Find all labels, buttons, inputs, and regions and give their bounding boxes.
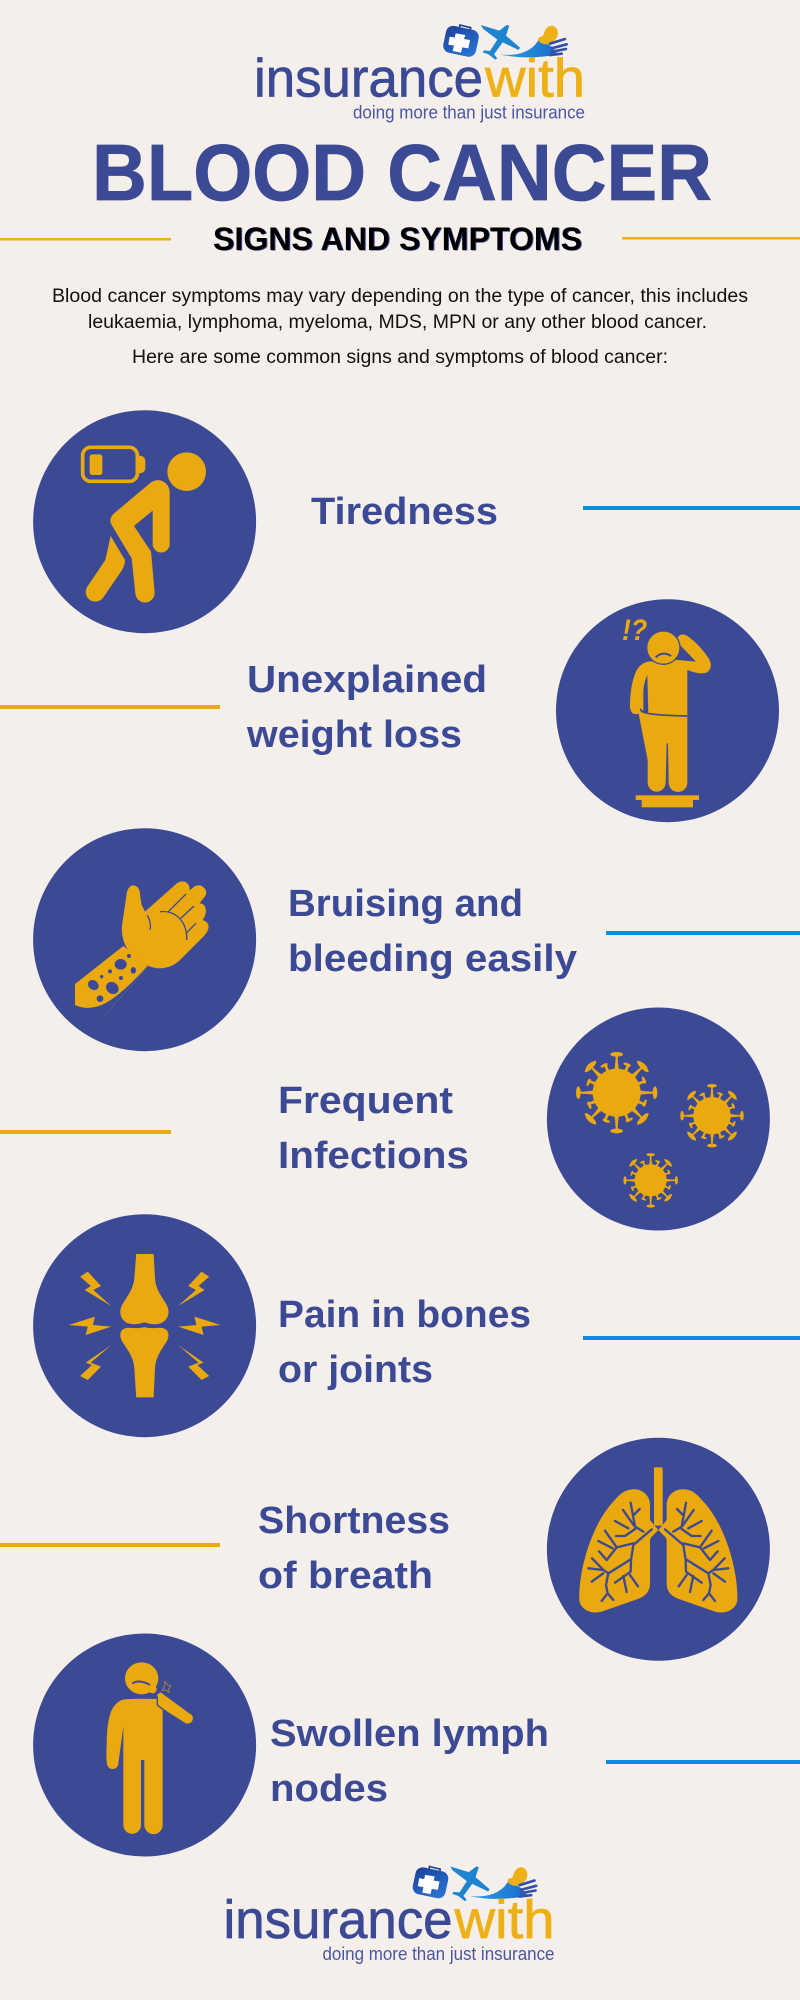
title: BLOOD CANCER	[92, 128, 712, 217]
panel: frequent infections	[0, 1008, 770, 1230]
panel: shortness of breath	[0, 1438, 770, 1661]
label	[246, 659, 487, 756]
label	[288, 883, 577, 980]
icon: person on scale	[622, 614, 711, 807]
icon: person touching neck	[106, 1662, 193, 1834]
logo: insurancewith top	[254, 25, 585, 122]
label	[278, 1080, 469, 1177]
logo tagline: doing more than just insurance	[322, 1944, 554, 1964]
label: nodes	[270, 1768, 388, 1810]
logo wordmark: with	[453, 1890, 554, 1950]
icon: person on scale: !?	[622, 614, 647, 647]
logo icons	[442, 25, 567, 60]
label: Shortness	[258, 1500, 450, 1542]
logo wordmark: insurance	[254, 49, 483, 109]
icon: tired person with low battery	[83, 447, 206, 603]
icon: bruised arm and hand	[75, 881, 209, 1016]
label: Frequent	[278, 1080, 453, 1122]
label: bleeding easily	[288, 938, 577, 980]
icon: knee joint with pain bolts	[69, 1254, 220, 1397]
logo wordmark: insurance	[224, 1890, 452, 1950]
icon: viruses	[576, 1052, 744, 1208]
intro text: Here are some common signs and symptoms of blood cancer:	[132, 347, 668, 368]
label: Unexplained	[247, 659, 487, 701]
panel: swollen lymph nodes	[33, 1634, 800, 1856]
label: Pain in bones	[278, 1294, 531, 1336]
logo wordmark: with	[484, 49, 585, 109]
label: or joints	[278, 1349, 433, 1391]
label: Bruising and	[288, 883, 523, 925]
panel: tiredness	[33, 410, 800, 633]
intro text: Blood cancer symptoms may vary depending on the type of cancer, this includes	[52, 286, 748, 307]
label: of breath	[258, 1555, 433, 1597]
logo: insurancewith bottom	[224, 1866, 554, 1964]
subtitle: SIGNS AND SYMPTOMS	[214, 222, 583, 258]
label	[278, 1294, 531, 1391]
label: Swollen lymph	[270, 1713, 549, 1755]
label	[258, 1500, 450, 1597]
icon: lungs	[579, 1467, 737, 1613]
intro text: leukaemia, lymphoma, myeloma, MDS, MPN or any other blood cancer.	[88, 312, 707, 333]
subtitle: SIGNS AND SYMPTOMS	[213, 221, 582, 257]
label: weight loss	[246, 714, 462, 756]
logo tagline: doing more than just insurance	[353, 102, 585, 122]
label	[270, 1713, 549, 1810]
label: Tiredness	[311, 491, 498, 533]
panel: pain in bones or joints	[33, 1214, 800, 1437]
label: Infections	[278, 1135, 469, 1177]
panel: unexplained weight loss	[0, 599, 779, 822]
panel: bruising and bleeding	[33, 828, 800, 1051]
logo icons	[411, 1866, 536, 1901]
intro text	[52, 286, 748, 368]
